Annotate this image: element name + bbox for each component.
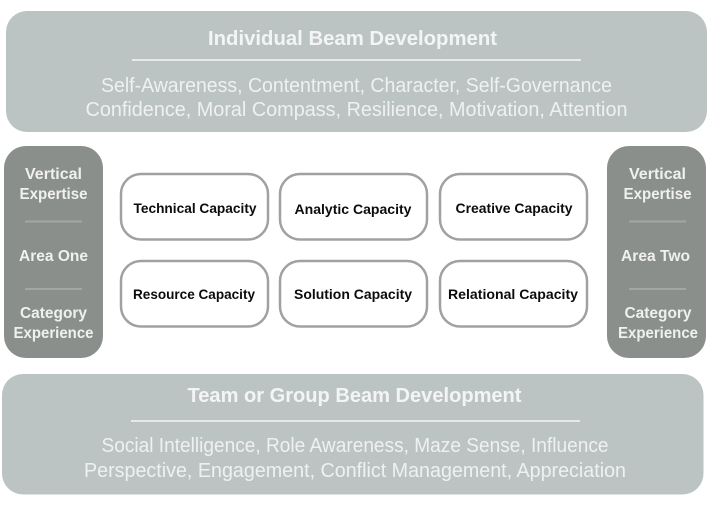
box: analytic capacity: Analytic Capacity: [294, 201, 412, 217]
box: technical capacity: Technical Capacity: [134, 200, 257, 216]
text block: individual traits: Confidence, Moral Compass, Resilience, Motivation, Attention: [86, 99, 628, 121]
box: solution capacity: [280, 261, 427, 326]
box: resource capacity: [121, 261, 268, 326]
panel: vertical expertise area two: Category: [624, 305, 692, 322]
text block: team traits: [84, 435, 626, 482]
panel: individual beam development: [6, 11, 707, 132]
panel: team or group beam development: [2, 374, 704, 494]
text block: team traits: Perspective, Engagement, Conflict Management, Appreciation: [84, 460, 626, 482]
box: creative capacity: Creative Capacity: [456, 200, 573, 216]
panel: vertical expertise area two: Vertical: [629, 166, 686, 183]
panel: vertical expertise area one: Vertical: [25, 166, 82, 183]
box: analytic capacity: [280, 174, 427, 240]
text block: individual traits: [86, 75, 628, 121]
panel: vertical expertise area two: Area Two: [621, 248, 690, 265]
panel: vertical expertise area two: Experience: [618, 325, 698, 342]
heading: team or group beam development: Team or Group Beam Development: [188, 385, 522, 407]
text block: individual traits: Self-Awareness, Contentment, Character, Self-Governance: [101, 75, 612, 97]
panel: vertical expertise area one: [4, 146, 103, 358]
panel: vertical expertise area one: Experience: [14, 325, 94, 342]
panel: vertical expertise area two: [607, 146, 706, 358]
box: creative capacity: [440, 174, 587, 240]
panel: vertical expertise area one: Category: [20, 305, 87, 322]
panel: vertical expertise area one: Area One: [19, 248, 88, 265]
panel: vertical expertise area one: Expertise: [20, 186, 88, 203]
text block: team traits: Social Intelligence, Role Awareness, Maze Sense, Influence: [102, 435, 608, 457]
box: relational capacity: Relational Capacity: [448, 286, 578, 302]
box: resource capacity: Resource Capacity: [133, 286, 255, 302]
box: technical capacity: [121, 174, 268, 240]
box: relational capacity: [440, 261, 587, 326]
heading: individual beam development: Individual Beam Development: [208, 28, 497, 50]
panel: vertical expertise area two: Expertise: [624, 186, 692, 203]
box: solution capacity: Solution Capacity: [294, 286, 412, 302]
panel: capacities grid: [121, 174, 587, 326]
